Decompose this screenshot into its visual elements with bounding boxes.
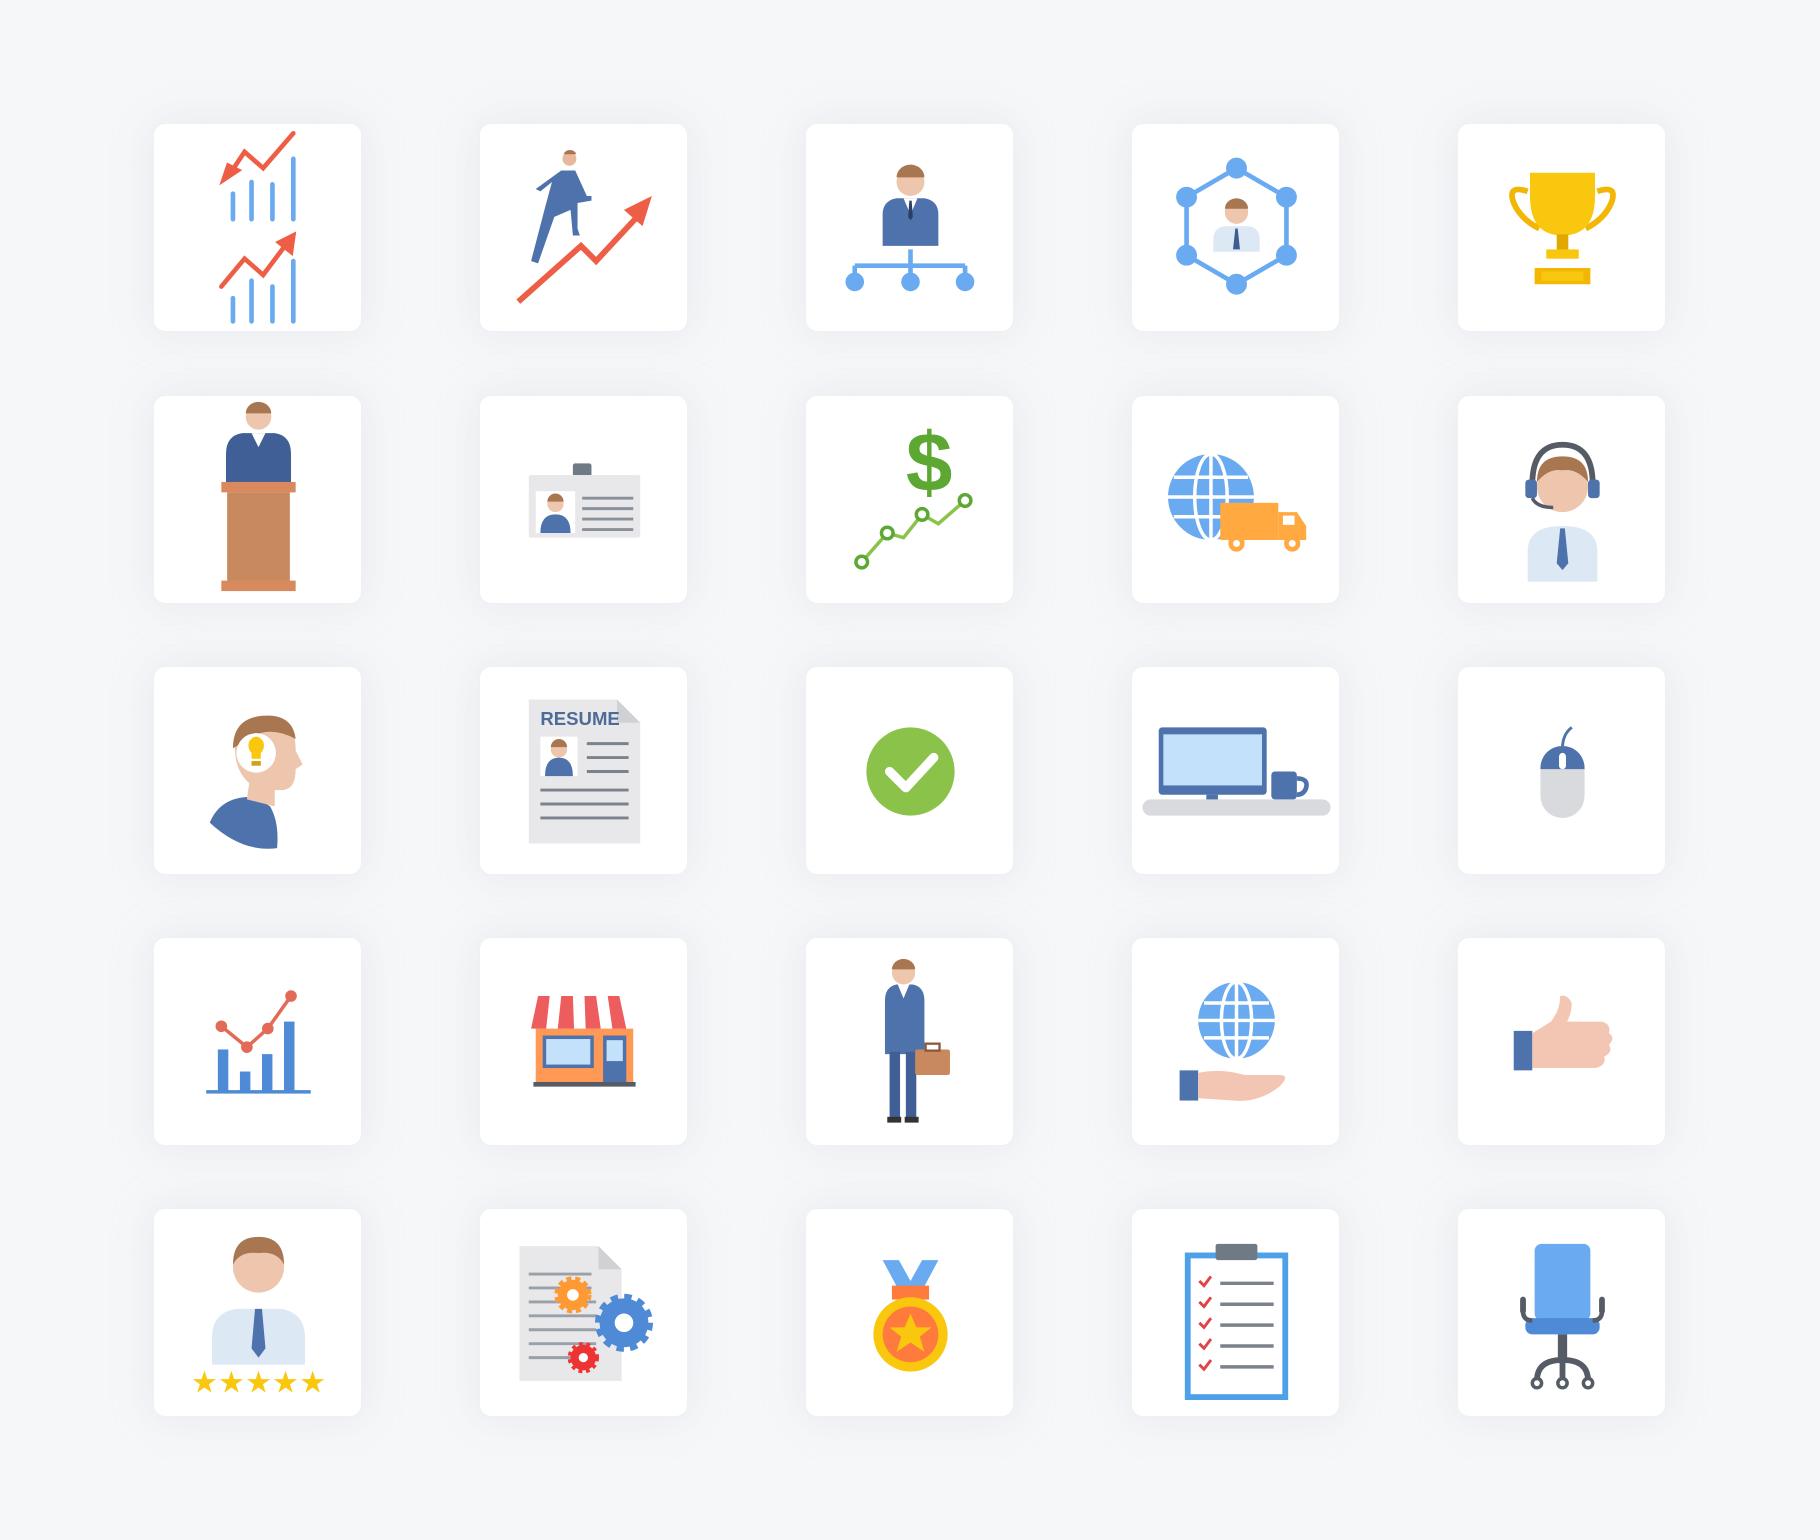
card: support agent [1457, 395, 1666, 604]
card: document settings [479, 1208, 688, 1417]
card: idea head [153, 666, 362, 875]
card: businessman briefcase [805, 937, 1014, 1146]
card: leader hierarchy [805, 123, 1014, 332]
card: medal [805, 1208, 1014, 1417]
card: rated employee [153, 1208, 362, 1417]
card: money growth [805, 395, 1014, 604]
card: rated employee: ★★★★★ [191, 1365, 326, 1400]
card: trophy [1457, 123, 1666, 332]
card: checklist [1131, 1208, 1340, 1417]
card: workstation [1131, 666, 1340, 875]
card: mouse [1457, 666, 1666, 875]
card: speaker podium [153, 395, 362, 604]
card: growth charts [153, 123, 362, 332]
card: network [1131, 123, 1340, 332]
card: resume [479, 666, 688, 875]
card: globe in hand [1131, 937, 1340, 1146]
card: analytics chart [153, 937, 362, 1146]
card: money growth: $ [906, 415, 952, 509]
card: ID badge [479, 395, 688, 604]
card: check [805, 666, 1014, 875]
card: thumbs up [1457, 937, 1666, 1146]
card: resume: RESUME [540, 708, 620, 729]
card: climbing businessman [479, 123, 688, 332]
card: global delivery [1131, 395, 1340, 604]
card: office chair [1457, 1208, 1666, 1417]
card: shop [479, 937, 688, 1146]
